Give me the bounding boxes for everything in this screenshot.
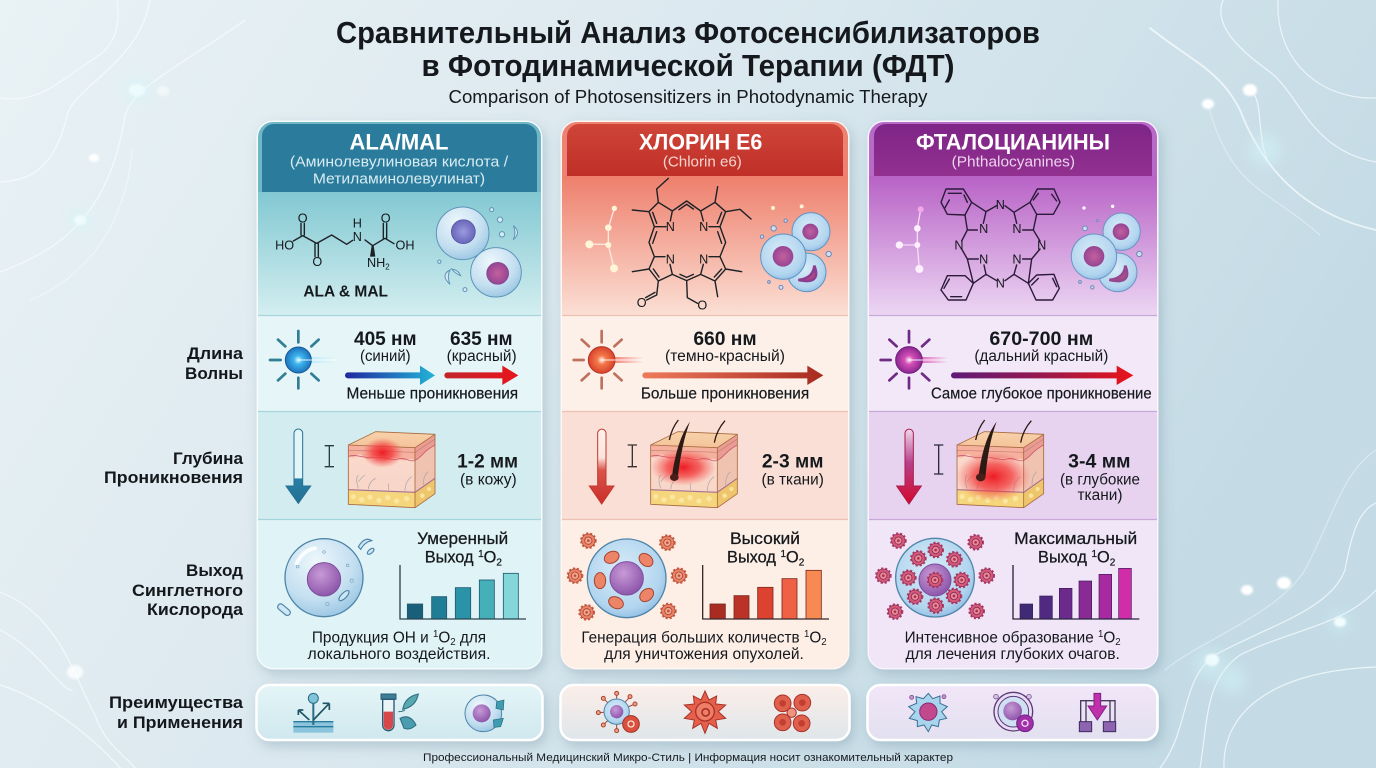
molecule: ALA structure: OH [396,238,414,252]
icon: red cell group [774,694,811,732]
depth value: 2-3 mm [761,452,824,488]
header: ALA/MAL: (Аминолевулиновая кислота / [290,155,509,171]
penetration note: Меньше проникновения [346,385,518,402]
wavelength: 405 nm: (синий) [360,348,411,365]
card background [868,120,1158,670]
molecule: phthalocyanine structure: N [954,238,964,252]
description: O [438,629,450,646]
bar chart: moderate yield [400,565,526,619]
depth value: 2-3 mm: (в ткани) [761,471,824,488]
icon: cell cluster [1071,205,1142,292]
description: 1 [1098,629,1103,640]
molecule: chlorin e6 structure: O [697,298,707,312]
row label: advantages and applications: и Применения [117,714,243,732]
wavelength: 670-700 nm [951,329,1133,385]
depth value: 3-4 mm [1060,452,1140,504]
description: 2 [1115,637,1121,648]
chart label: maximum yield: 2 [1110,557,1116,568]
wavelength: 660 nm: (темно-красный) [665,348,785,365]
chart label: moderate yield: Выход [425,549,474,567]
molecule: phthalocyanine structure [941,189,1060,300]
depth value: 1-2 mm: (в кожу) [460,471,517,488]
title: Сравнительный Анализ Фотосенсибилизаторов [336,15,1040,50]
description: Продукция OH и [312,629,429,646]
strip: ALA/MAL applications [256,685,542,740]
wavelength: 635 nm: (красный) [447,348,517,365]
icon: skin block with shallow glow [348,432,435,508]
molecule: ALA structure: O [312,255,322,269]
icon: deep delivery arrow [1079,693,1116,732]
bar chart: high yield [703,565,829,619]
title [336,15,1040,83]
icon: skin penetration [293,693,333,733]
row label: wavelength [185,345,244,383]
molecule: phthalocyanine structure: N [1037,238,1046,252]
description [905,629,1121,663]
strip: Chlorin E6 applications [560,685,850,740]
icon: depth arrow [286,429,311,503]
chart label: high yield [727,530,805,568]
row label: singlet oxygen yield [132,562,244,619]
row label: singlet oxygen yield: Выход [186,562,244,580]
icon: cell cluster [760,204,831,292]
depth value: 3-4 mm: 3-4 мм [1068,452,1130,473]
icon: spiky tumor cell [684,691,726,733]
icon: targeted cell [596,691,639,733]
description: Генерация больших количеств [581,629,800,646]
header: Chlorin E6: (Chlorin e6) [663,155,742,171]
row label: wavelength: Длина [187,345,244,363]
description: 1 [433,629,438,640]
chart label: maximum yield [1014,530,1137,568]
strip: Phthalocyanines applications [868,685,1158,740]
description: для лечения глубоких очагов. [905,646,1120,663]
chart label: high yield: Выход [727,549,776,567]
row label: singlet oxygen yield: Синглетного [132,582,243,600]
bar chart: maximum yield [1013,565,1139,619]
row label: advantages and applications: Преимущества [109,694,244,712]
description: O [809,629,821,646]
wavelength: 670-700 nm: (дальний красный) [974,348,1108,365]
chart label: maximum yield: 1 [1091,549,1097,560]
icon: depth scale [325,446,334,467]
wavelength: 670-700 nm: 670-700 нм [989,329,1093,350]
footer note: Профессиональный Медицинский Микро-Стиль | Информация носит ознакомительный характер [423,752,953,764]
wavelength: 635 nm: 635 нм [450,329,513,350]
header: Chlorin E6 [639,129,762,171]
molecule: phthalocyanine structure: N [1012,222,1022,236]
chart label: moderate yield: Умеренный [417,530,508,548]
chart label: high yield: 2 [799,557,805,568]
header: Chlorin E6: ХЛОРИН E6 [639,129,762,154]
chart label: moderate yield [417,530,508,568]
icon: skin block with hair [651,420,737,508]
wavelength: 660 nm [642,329,823,385]
chart label: high yield: 1 [780,549,786,560]
header: ALA/MAL: ALA/MAL [349,129,448,154]
description [307,629,490,663]
icon: glowing network [896,206,924,273]
wavelength: 405 nm [345,329,435,385]
description: для [456,629,486,646]
icon: depth arrow [589,429,614,504]
wavelength: 635 nm [444,329,518,385]
depth value: 3-4 mm: ткани) [1077,487,1122,504]
icon: light source red [574,331,643,388]
molecule: ALA structure: 2 [385,262,390,271]
icon: test tube and leaf [381,694,418,731]
molecule: ALA structure: NH [367,256,385,270]
icon: spiky cell [909,693,947,732]
description [581,629,827,663]
molecule: ALA structure: O [298,212,308,226]
molecule: chlorin e6 structure: N [699,220,708,234]
chart label: maximum yield: Максимальный [1014,530,1137,548]
molecule: ALA structure: N [353,230,362,244]
penetration note: Больше проникновения [641,385,809,402]
row label: penetration depth: Глубина [173,450,244,468]
card background [256,120,542,670]
chart label: high yield: O [786,549,799,567]
card background [560,120,850,670]
molecule: ALA structure: O [381,212,391,226]
wavelength: 660 nm: 660 нм [693,329,757,350]
molecule: ALA structure: HO [275,238,294,252]
header: ALA/MAL [290,129,509,187]
depth value: 3-4 mm: (в глубокие [1060,471,1140,488]
molecule: chlorin e6 structure [632,178,751,312]
icon: treated cell [465,695,504,732]
icon: depth arrow [897,429,921,504]
molecule: phthalocyanine structure: N [979,253,988,267]
molecule: ALA structure: ALA & MAL [303,284,388,301]
depth value: 2-3 mm: 2-3 мм [762,452,823,473]
illustration: cell [276,539,375,617]
chart label: moderate yield: O [484,549,496,567]
row label: advantages and applications [109,694,244,732]
icon: light source blue [270,331,338,388]
row label: wavelength: Волны [185,365,243,383]
panel: ALA/MAL [256,120,542,670]
header: ALA/MAL: Метиламинолевулинат) [313,171,485,187]
illustration: cell with pathogens [568,534,686,619]
icon: depth scale [934,445,943,474]
description: 2 [450,637,456,648]
description: локального воздействия. [307,646,490,663]
molecule: chlorin e6 structure: N [666,252,675,266]
title: в Фотодинамической Терапии (ФДТ) [422,48,954,83]
molecule: phthalocyanine structure: N [996,277,1005,291]
molecule: chlorin e6 structure: N [666,220,675,234]
row label: singlet oxygen yield: Кислорода [147,601,244,619]
header: Phthalocyanines: (Phthalocyanines) [952,155,1075,171]
molecule: phthalocyanine structure: N [979,222,988,236]
chart label: maximum yield: O [1097,549,1110,567]
chart label: high yield: Высокий [730,530,800,548]
description: 1 [804,629,809,640]
depth value: 1-2 mm [457,452,518,488]
description: 2 [821,637,827,648]
subtitle: Comparison of Photosensitizers in Photodynamic Therapy [448,86,928,107]
molecule: phthalocyanine structure: N [996,198,1005,212]
description: O [1103,629,1115,646]
penetration note: Самое глубокое проникновение [931,385,1152,402]
header: Phthalocyanines: ФТАЛОЦИАНИНЫ [916,129,1110,154]
chart label: maximum yield: Выход [1038,549,1087,567]
icon: depth scale [628,445,637,467]
depth value: 1-2 mm: 1-2 мм [457,452,518,473]
molecule: chlorin e6 structure: N [699,252,708,266]
row label: penetration depth [104,450,244,487]
chart label: moderate yield: 2 [496,557,502,568]
molecule: chlorin e6 structure: O [637,296,647,310]
description: Интенсивное образование [905,629,1094,646]
description: для уничтожения опухолей. [604,646,804,663]
icon: glowing network [585,206,618,272]
icon: skin block deep glow [956,420,1044,508]
molecule: ALA structure: H [353,217,362,231]
icon: two cells [436,207,521,297]
chart label: moderate yield: 1 [478,549,484,560]
wavelength: 405 nm: 405 нм [354,329,417,350]
molecule: ALA structure [275,212,414,301]
header: Phthalocyanines [916,129,1110,171]
illustration: cell with many pathogens [876,534,994,619]
panel: Phthalocyanines [868,120,1158,670]
panel: Chlorin E6 [560,120,850,670]
row label: penetration depth: Проникновения [104,469,243,487]
icon: ringed cell [994,692,1033,732]
icon: light source magenta [881,331,948,388]
molecule: phthalocyanine structure: N [1012,253,1022,267]
